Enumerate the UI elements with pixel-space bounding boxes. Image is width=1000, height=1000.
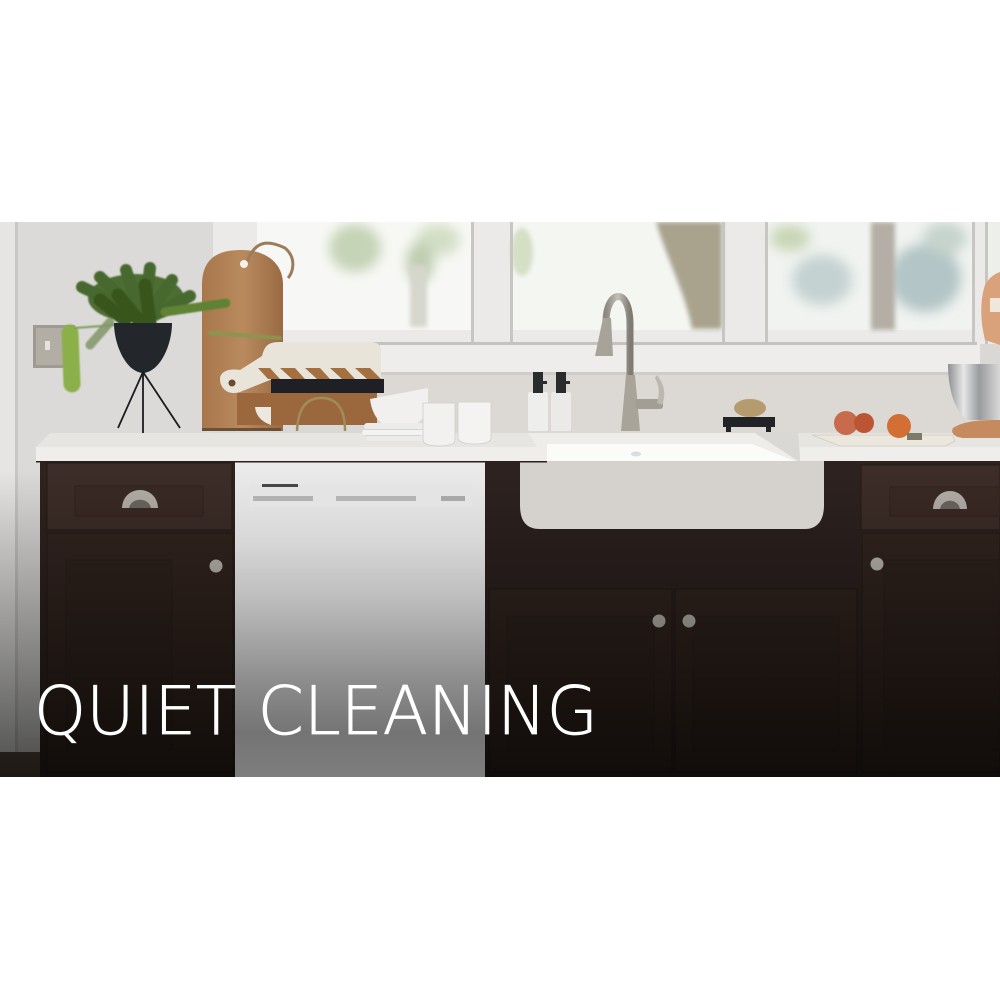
countertop [36,433,1000,462]
cabinets [40,461,1000,777]
trees outside [329,224,460,282]
light switch [33,325,75,368]
infographic [0,222,1000,777]
right drawer [861,465,1000,530]
left drawer [47,463,232,530]
control panel [253,484,465,501]
stand mixer [948,272,1000,438]
soap dispensers [528,372,571,431]
bowls plates and mugs [362,388,491,446]
right door [862,532,1000,594]
wooden cutting board [202,243,293,431]
windows [213,222,1000,375]
sink doors [489,589,857,772]
marble board with stripes [220,342,384,431]
kitchen photo [0,222,1000,777]
title: quiet cleaning: QUIET CLEANING [34,672,598,750]
plant in black pot [70,268,280,433]
sink basin [520,461,824,529]
peaches on board [812,411,955,446]
left door [46,532,234,594]
faucet [595,296,664,431]
wall [0,222,1000,777]
backsplash [380,375,1000,433]
brush on soap tray [723,399,775,432]
dishwasher [235,462,485,777]
door knobs [210,558,884,628]
drawer pulls [122,490,967,509]
lower dark gradient overlay [0,470,1000,777]
